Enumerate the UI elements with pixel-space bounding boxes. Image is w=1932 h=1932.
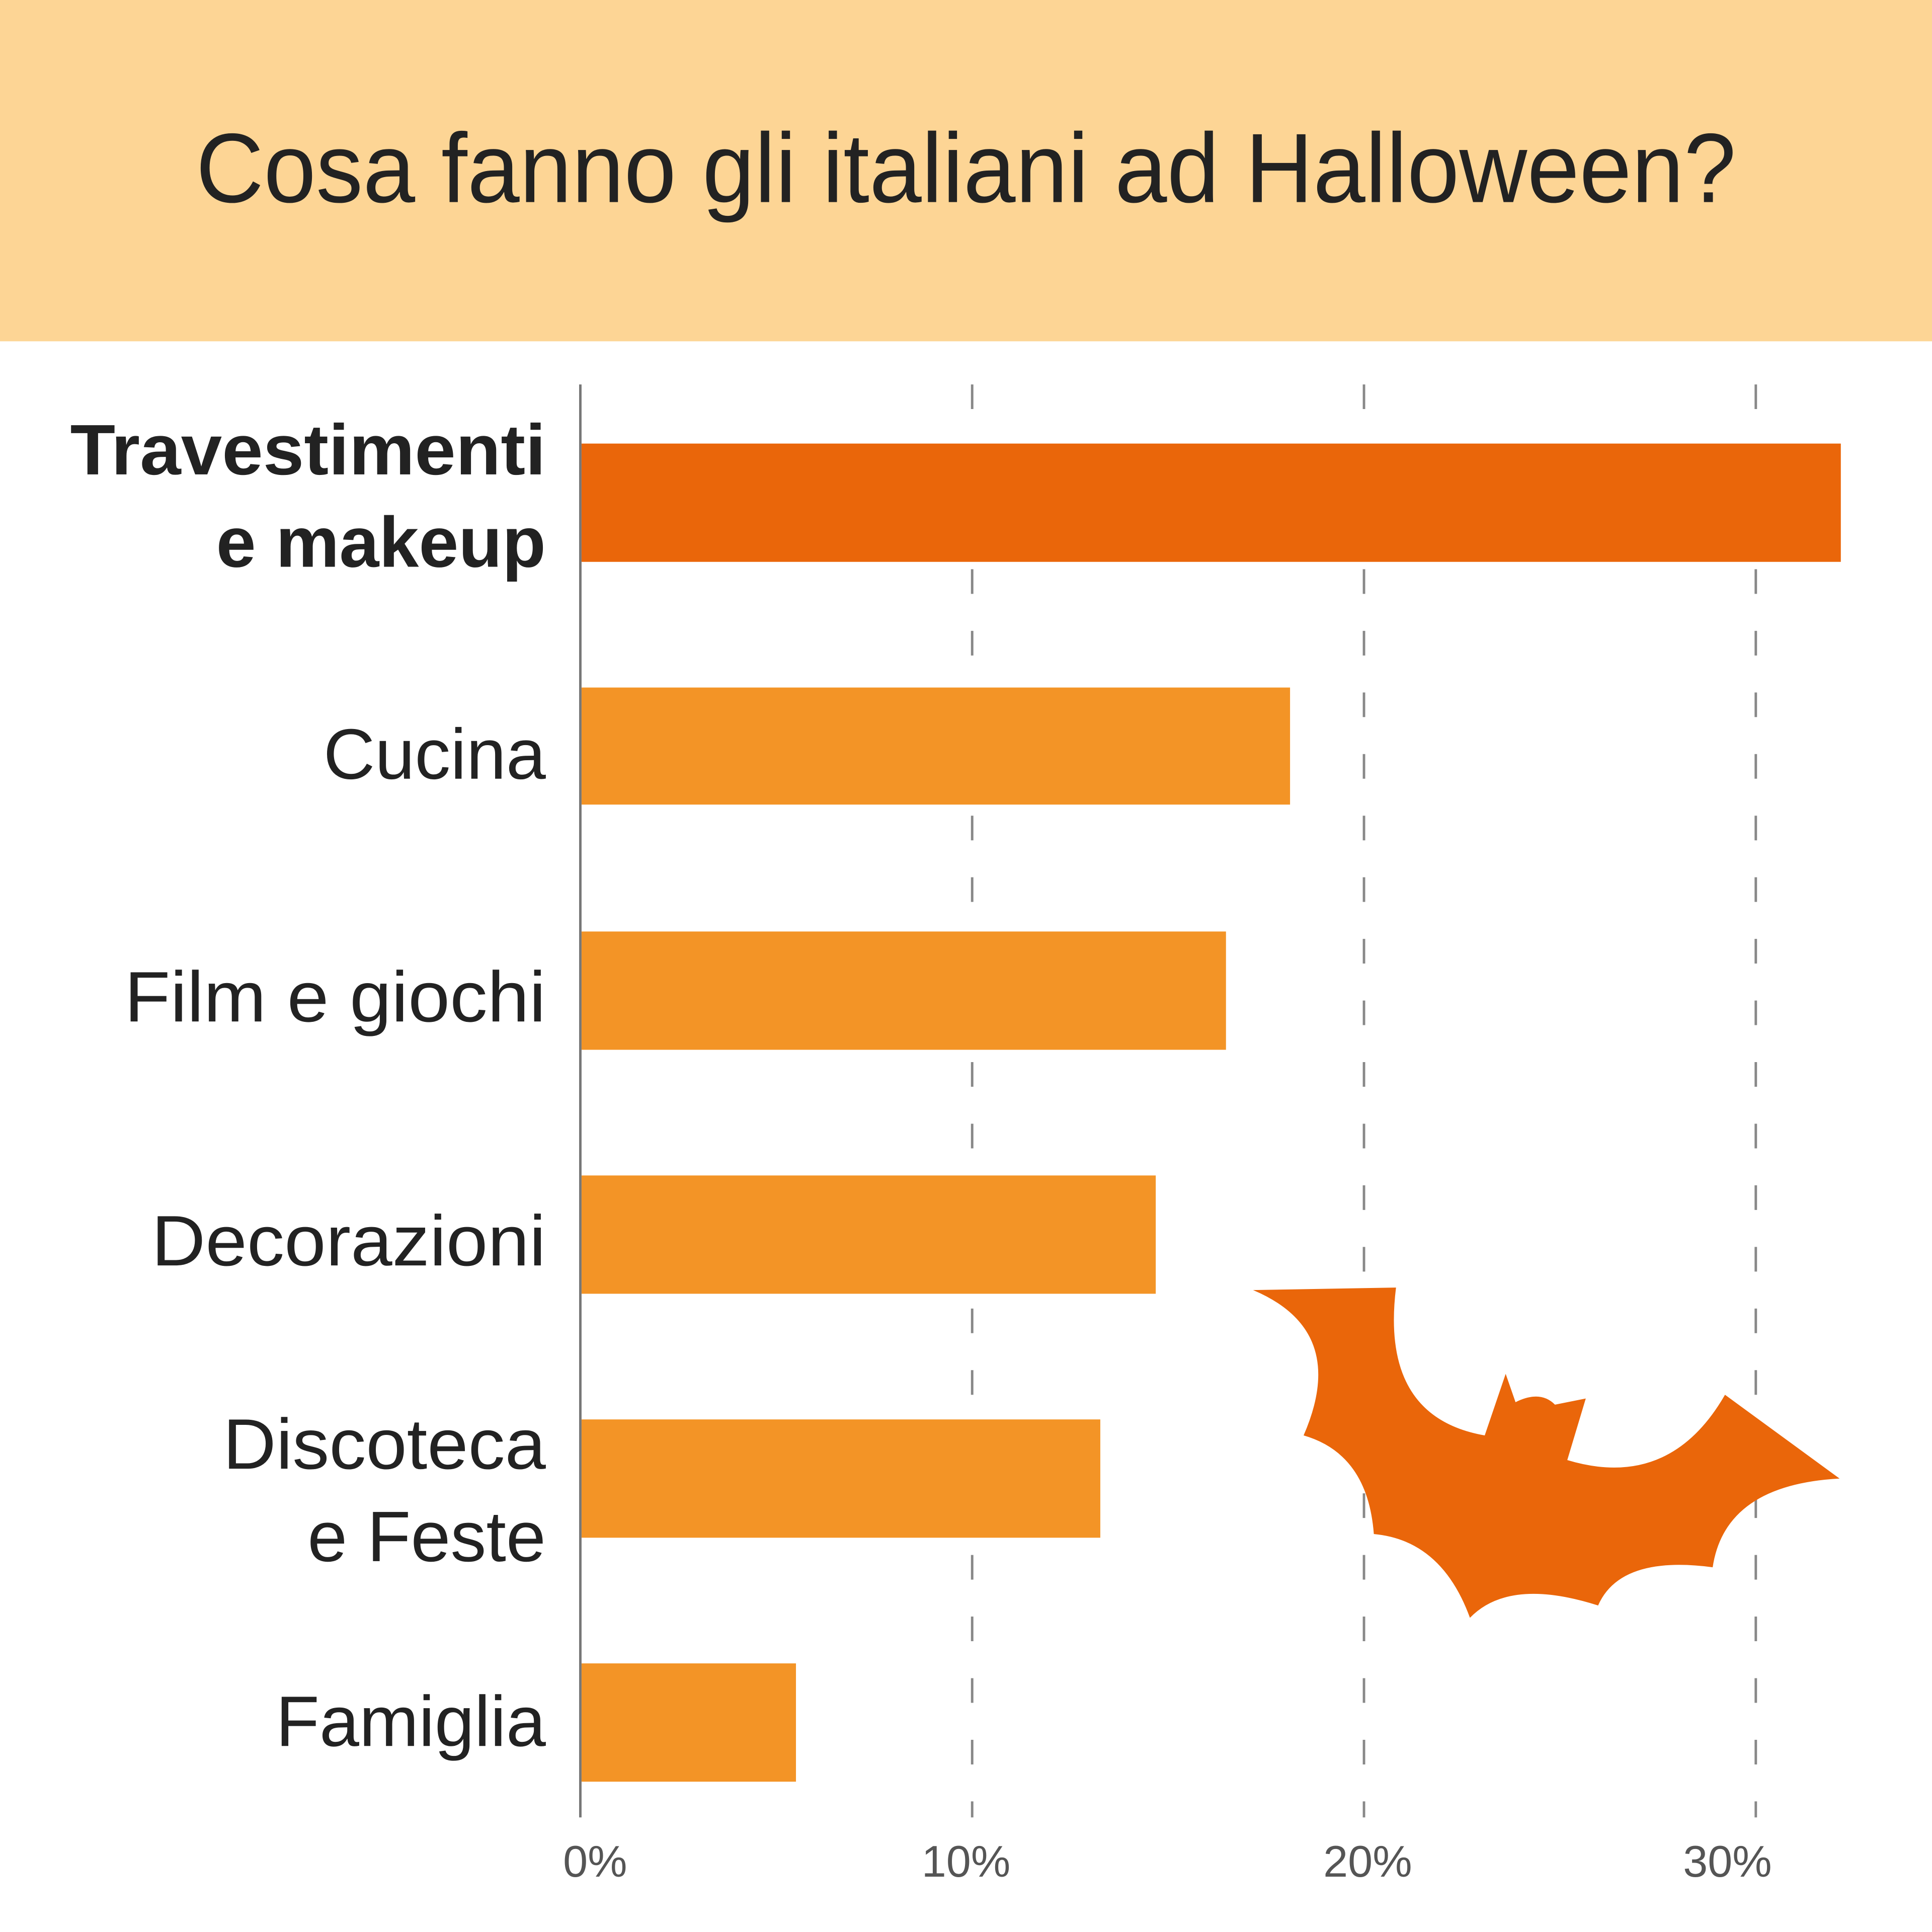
category labels — [70, 410, 546, 1761]
bar chart — [582, 444, 1841, 1782]
axis tick labels — [563, 1836, 1772, 1886]
category labels: Film e giochi — [124, 957, 546, 1037]
category labels: Travestimenti — [70, 410, 546, 490]
axis tick labels: 10% — [922, 1836, 1010, 1886]
axis tick labels: 20% — [1323, 1836, 1412, 1886]
header band — [0, 0, 1932, 341]
axis line — [580, 384, 581, 1817]
category labels: Decorazioni — [151, 1201, 546, 1281]
axis tick labels: 30% — [1683, 1836, 1772, 1886]
category labels: Famiglia — [276, 1681, 546, 1761]
gridlines — [972, 384, 1756, 1817]
category labels: e Feste — [307, 1497, 546, 1577]
axis tick labels: 0% — [563, 1836, 627, 1886]
icon: bat — [1253, 1287, 1839, 1618]
category labels: Discoteca — [223, 1404, 546, 1484]
title: Cosa fanno gli italiani ad Halloween? — [196, 113, 1736, 223]
category labels: e makeup — [216, 503, 546, 583]
category labels: Cucina — [324, 714, 546, 794]
